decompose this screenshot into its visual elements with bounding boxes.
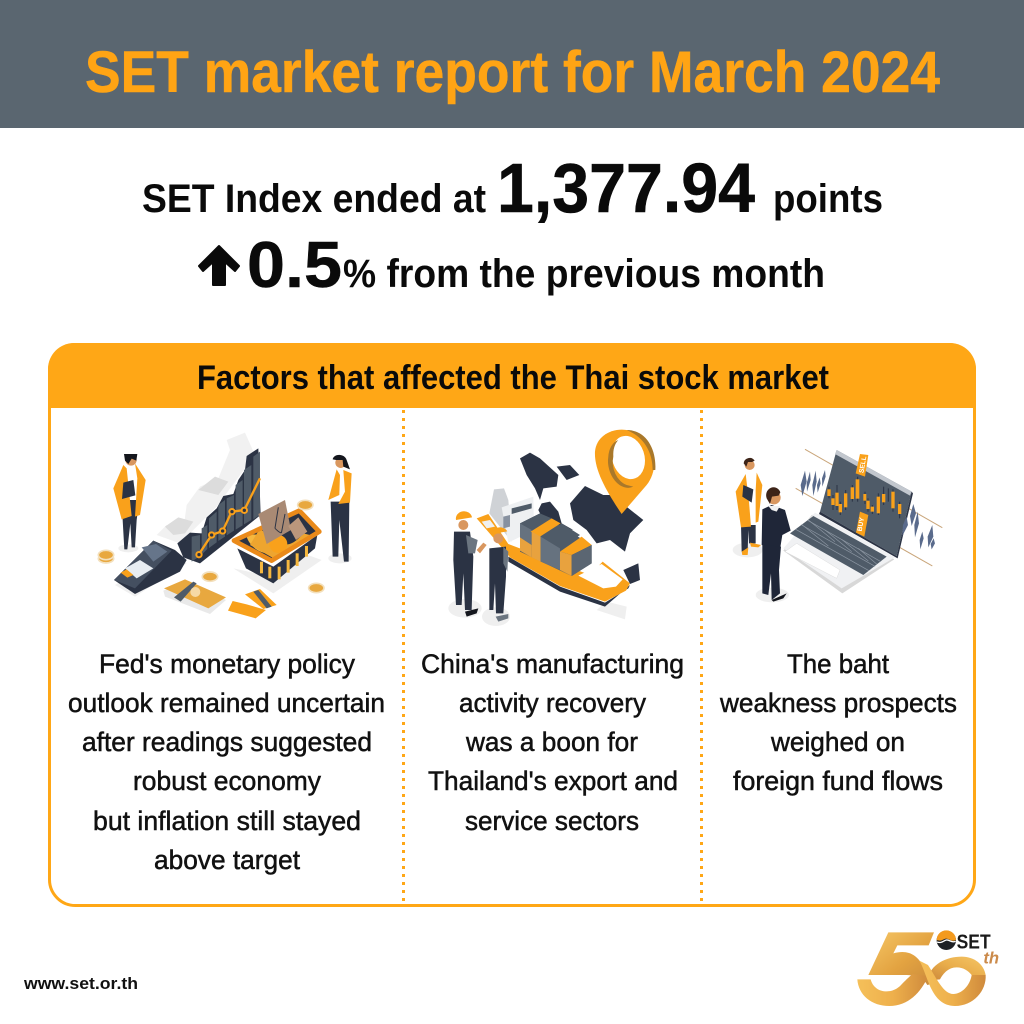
headline: SET Index value: 1,377.94 (497, 149, 755, 227)
payment terminal (114, 541, 187, 594)
workers (453, 511, 508, 622)
text: Fed's monetary policy: after readings suggested (82, 727, 372, 757)
ship hull (477, 514, 630, 607)
text: Fed's monetary policy: but inflation still stayed (93, 806, 361, 836)
candlestick chart: BUY (857, 516, 866, 532)
text: baht weakness: weakness prospects (719, 688, 957, 718)
text: Fed's monetary policy: robust economy (133, 766, 322, 796)
text: baht weakness: weighed on (770, 727, 905, 757)
logo: SET 50th (857, 930, 999, 1006)
text: China's manufacturing: Thailand's export and (428, 766, 678, 796)
panel: factors (48, 343, 976, 906)
logo: SET 50th: SET (957, 930, 991, 953)
title: SET market report for March 2024 (85, 40, 940, 105)
headline: monthly change (199, 228, 825, 301)
text: China's manufacturing (421, 649, 684, 836)
website url: www.set.or.th (23, 974, 138, 993)
text: Fed's monetary policy: Fed's monetary policy (99, 649, 356, 679)
logo: SET 50th: th (983, 948, 999, 967)
person: woman (328, 455, 352, 562)
laptop (783, 513, 895, 593)
location pin (595, 430, 655, 514)
text: Fed's monetary policy (68, 649, 385, 875)
containers (520, 513, 592, 576)
ship superstructure (489, 488, 534, 543)
headline: monthly change: % from the previous month (343, 252, 825, 296)
illustration: economy chart, payment terminal and basket (98, 433, 352, 618)
illustration: cargo ship, world map and location pin (448, 430, 655, 626)
candlestick chart: SELL (858, 456, 868, 474)
text: baht weakness (719, 649, 957, 796)
person: man with folder (113, 454, 146, 549)
header band (0, 0, 1024, 128)
headline: monthly change: 0.5 (247, 228, 342, 301)
text: Fed's monetary policy: outlook remained uncertain (68, 688, 385, 718)
cash and cards (163, 579, 277, 618)
text: China's manufacturing: was a boon for (465, 727, 638, 757)
text: Fed's monetary policy: above target (154, 845, 301, 875)
person: trader in suit (762, 487, 791, 602)
text: China's manufacturing: China's manufacturing (421, 649, 684, 679)
headline: SET Index value: points (773, 177, 883, 221)
headline: SET Index value (142, 149, 883, 227)
text: China's manufacturing: activity recovery (459, 688, 647, 718)
text: baht weakness: foreign fund flows (733, 766, 943, 796)
shopping basket (233, 500, 321, 583)
coins (98, 500, 324, 593)
text: China's manufacturing: service sectors (465, 806, 639, 836)
headline: SET Index value: SET Index ended at (142, 177, 486, 221)
person: trader in orange coat (736, 458, 762, 555)
panel heading: Factors that affected the Thai stock market (197, 359, 829, 397)
candlestick chart (796, 449, 942, 566)
illustration: traders with laptop and candlestick chart (733, 449, 942, 602)
world map (520, 453, 643, 584)
text: baht weakness: The baht (787, 649, 890, 679)
